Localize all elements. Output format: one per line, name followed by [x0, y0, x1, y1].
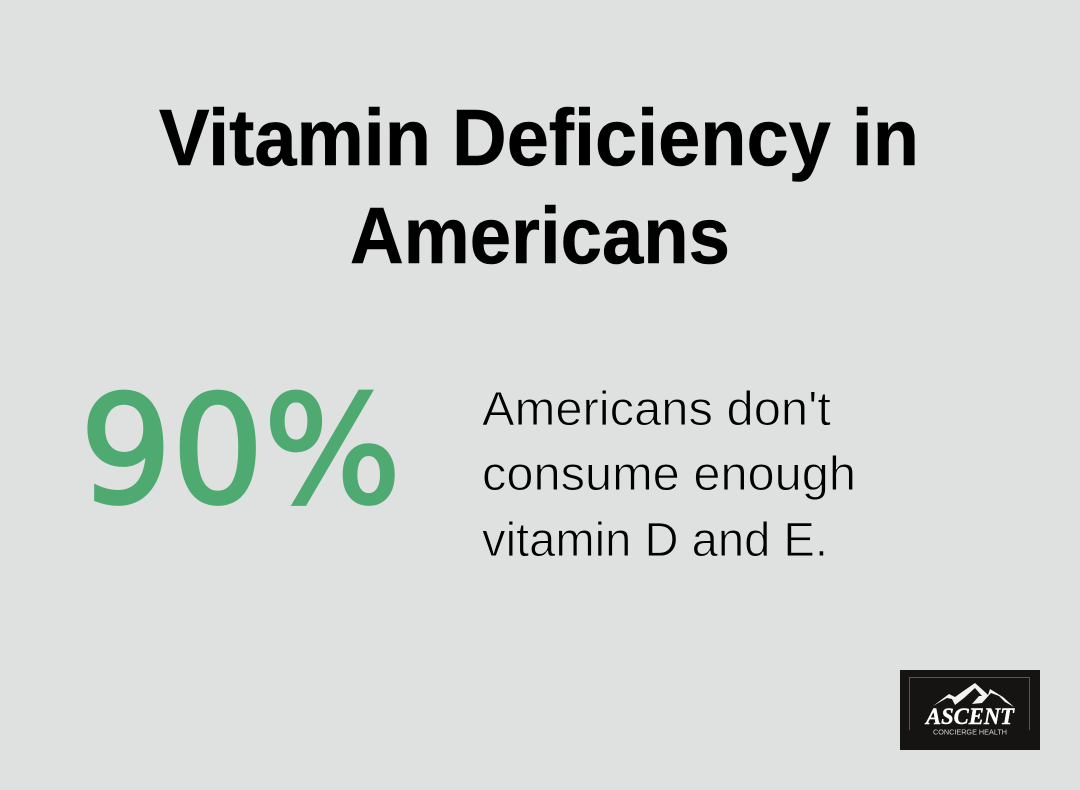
title: Vitamin Deficiency in	[159, 93, 919, 182]
description text: Americans don't	[482, 383, 831, 436]
description text	[482, 383, 856, 567]
description text: consume enough	[482, 448, 856, 501]
logo wordmark: ASCENT	[924, 704, 1015, 729]
logo tagline: CONCIERGE HEALTH	[933, 728, 1007, 736]
title	[159, 93, 919, 280]
description text: vitamin D and E.	[482, 514, 828, 567]
title: Americans	[350, 191, 730, 280]
logo: Ascent Concierge Health	[900, 670, 1040, 750]
icon: mountains	[933, 683, 1014, 707]
statistic: 90%: 90%	[80, 365, 401, 538]
